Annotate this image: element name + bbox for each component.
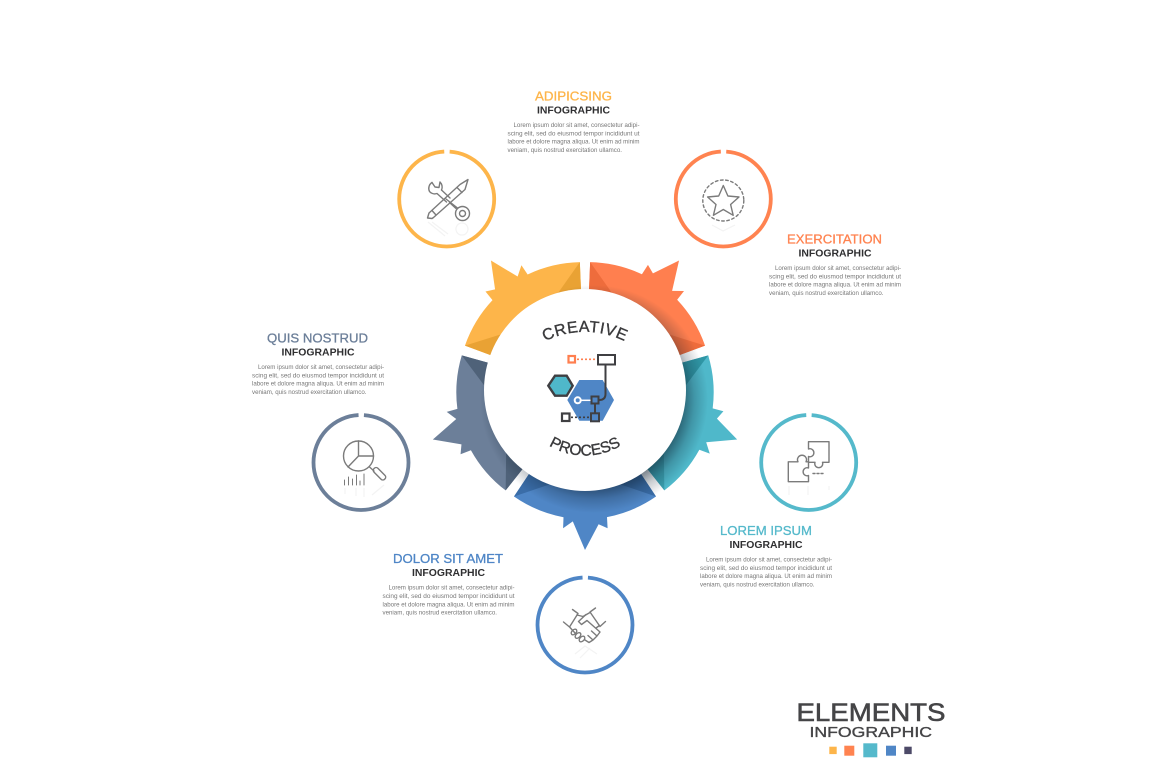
icon reflection [712, 225, 735, 231]
text block: dolor sit amet: scing elit, sed do eiusmod tempor incididunt ut [382, 593, 515, 600]
heading: process: PROCESS [550, 436, 620, 456]
icon reflection [789, 486, 829, 495]
icon: process diagram [548, 355, 615, 421]
segment: orange arrow [574, 219, 736, 368]
segment: slate arrow [411, 347, 532, 507]
text block: exercitation: labore et dolore magna aliqua. Ut enim ad minim [769, 282, 901, 289]
icon: star in dashed circle [703, 180, 744, 221]
text block: adipicsing [508, 88, 640, 154]
text block: dolor sit amet [382, 551, 515, 617]
segment: yellow arrow [434, 219, 596, 368]
logo: elements infographic: INFOGRAPHIC [810, 724, 932, 741]
ring: handshake [538, 578, 632, 672]
text block: exercitation: EXERCITATION [787, 232, 882, 246]
text block: quis nostrud: labore et dolore magna aliqua. Ut enim ad minim [252, 381, 384, 388]
ring: tools [399, 152, 494, 246]
text block: adipicsing: ADIPICSING [535, 88, 612, 104]
logo: elements infographic [796, 699, 946, 757]
text block: dolor sit amet: DOLOR SIT AMET [393, 551, 503, 566]
text block: exercitation: veniam, quis nostrud exercitation ullamco. [769, 290, 884, 297]
segment: teal arrow [638, 347, 759, 507]
text block: quis nostrud [252, 330, 384, 396]
shadow of centre disc [480, 285, 708, 513]
text block: dolor sit amet: veniam, quis nostrud exercitation ullamco. [382, 610, 497, 617]
text block: dolor sit amet: labore et dolore magna aliqua. Ut enim ad minim [382, 601, 515, 608]
heading: creative: CREATIVE [542, 320, 628, 341]
text block: adipicsing: veniam, quis nostrud exercitation ullamco. [508, 147, 622, 154]
text block: lorem ipsum [700, 523, 832, 588]
text block: quis nostrud: INFOGRAPHIC [282, 346, 355, 358]
text block: adipicsing: Lorem ipsum dolor sit amet, consectetur adipi- [514, 122, 640, 129]
ring: chart [314, 415, 408, 510]
text block: lorem ipsum: veniam, quis nostrud exercitation ullamco. [700, 581, 815, 588]
text block: lorem ipsum: scing elit, sed do eiusmod tempor incididunt ut [700, 565, 832, 572]
icon reflection [575, 646, 597, 658]
ring: star [676, 152, 771, 246]
text block: lorem ipsum: LOREM IPSUM [720, 523, 812, 538]
text block: exercitation: Lorem ipsum dolor sit amet, consectetur adipi- [775, 265, 901, 272]
text block: dolor sit amet: INFOGRAPHIC [412, 567, 485, 579]
text block: dolor sit amet: Lorem ipsum dolor sit amet, consectetur adipi- [388, 585, 514, 592]
text block: lorem ipsum: labore et dolore magna aliqua. Ut enim ad minim [700, 573, 832, 580]
logo: elements infographic: ELEMENTS [796, 699, 946, 727]
text block: exercitation [769, 232, 901, 297]
icon reflection [428, 222, 468, 236]
segment: blue arrow [514, 469, 656, 550]
text block: quis nostrud: QUIS NOSTRUD [267, 330, 368, 346]
ring: puzzle [761, 415, 856, 510]
icon reflection [345, 485, 384, 497]
text block: quis nostrud: scing elit, sed do eiusmod tempor incididunt ut [252, 372, 384, 379]
icon: magnifier over pie chart [344, 441, 387, 485]
icon: handshake [564, 608, 606, 643]
text block: adipicsing: labore et dolore magna aliqua. Ut enim ad minim [508, 139, 640, 146]
text block: adipicsing: scing elit, sed do eiusmod tempor incididunt ut [508, 130, 640, 137]
text block: quis nostrud: Lorem ipsum dolor sit amet, consectetur adipi- [258, 364, 384, 371]
text block: exercitation: scing elit, sed do eiusmod tempor incididunt ut [769, 273, 901, 280]
icon: puzzle pieces [788, 442, 829, 482]
centre disc [484, 289, 686, 491]
icon: wrench and pen [428, 180, 470, 220]
text block: adipicsing: INFOGRAPHIC [537, 104, 610, 116]
text block: lorem ipsum: Lorem ipsum dolor sit amet, consectetur adipi- [706, 556, 832, 564]
text block: quis nostrud: veniam, quis nostrud exercitation ullamco. [252, 389, 367, 396]
text block: lorem ipsum: INFOGRAPHIC [730, 539, 803, 551]
text block: exercitation: INFOGRAPHIC [798, 248, 872, 260]
